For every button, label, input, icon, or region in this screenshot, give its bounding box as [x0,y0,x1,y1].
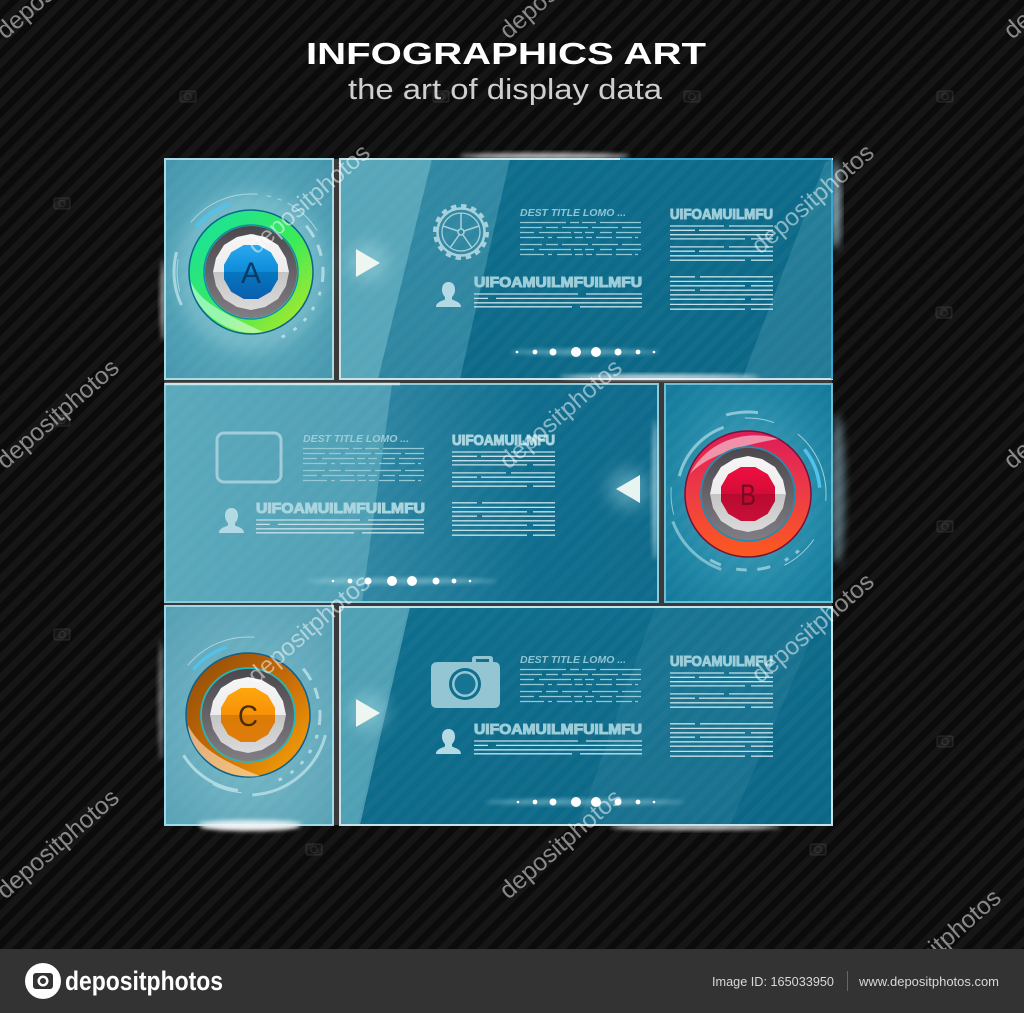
panel B: middle right [665,384,832,602]
bottom text lines [474,741,642,754]
right heading: UIFOAMUILMFU [670,206,773,223]
icon: person [219,508,244,533]
decorative arcs A [141,162,361,382]
panel: top right content [340,159,832,380]
bottom text lines [474,294,642,307]
bottom heading: UIFOAMUILMFUILMFU [256,500,425,517]
colored ring A [189,210,313,334]
paragraph lines [303,448,424,480]
decorative arcs C [138,605,358,825]
depositphotos watermarks: depositphotos [495,354,628,475]
depositphotos watermarks: depositphotos [495,784,628,905]
icon: person [436,729,461,754]
gaps between panels [164,159,832,825]
depositphotos watermarks: depositphotos [747,568,880,689]
colored ring C [186,653,310,777]
colored ring B [685,431,811,557]
pagination dots [307,576,497,586]
subtitle: the art of display data [348,74,663,106]
image id: Image ID: 165033950 [712,974,834,989]
arrow: right pointing [348,692,388,732]
decorative arcs B [637,383,859,605]
title: INFOGRAPHICS ART [306,36,706,71]
icon: person [436,282,461,307]
depositphotos watermarks: depositphotos [243,139,376,260]
letter A: A [241,257,261,290]
arrow: right pointing [348,242,388,282]
depositphotos watermarks: depositphotos [243,569,376,690]
footer bar [0,949,1024,1013]
core A [224,245,278,299]
right text lines [452,452,555,535]
right heading: UIFOAMUILMFU [670,653,773,670]
glow behind panels [158,153,845,831]
bottom heading: UIFOAMUILMFUILMFU [474,274,642,291]
icon: camera [431,656,500,708]
icon: gear [435,206,487,258]
core C [221,688,275,742]
core B [721,467,775,521]
arrow: left pointing [608,469,648,509]
right text lines [670,226,773,309]
icon: tablet [217,433,281,482]
panel: middle left content [165,384,658,602]
letter C: C [238,700,258,733]
panel: bottom right content [340,607,832,825]
letter B: B [740,479,756,512]
right text lines [670,673,773,756]
panel C: bottom left [165,606,333,828]
panel A: top left [165,159,333,379]
bottom text lines [256,520,424,533]
faint camera watermarks [54,91,953,855]
footer logo icon [25,963,61,999]
small title text: DEST TITLE LOMO ... [520,208,626,219]
depositphotos watermarks: depositphotos [747,139,880,260]
footer logo text: depositphotos [65,966,223,996]
badge A [141,162,361,382]
small title text: DEST TITLE LOMO ... [303,434,409,445]
paragraph lines [520,222,641,254]
badge C [138,605,358,825]
badge B [637,383,859,605]
pagination dots [485,797,685,807]
pagination dots [510,347,660,357]
bottom heading: UIFOAMUILMFUILMFU [474,721,642,738]
small title text: DEST TITLE LOMO ... [520,655,626,666]
paragraph lines [520,670,641,702]
right heading: UIFOAMUILMFU [452,432,555,449]
website: www.depositphotos.com [858,974,999,989]
depositphotos watermarks: depositphotos [874,884,1007,1005]
